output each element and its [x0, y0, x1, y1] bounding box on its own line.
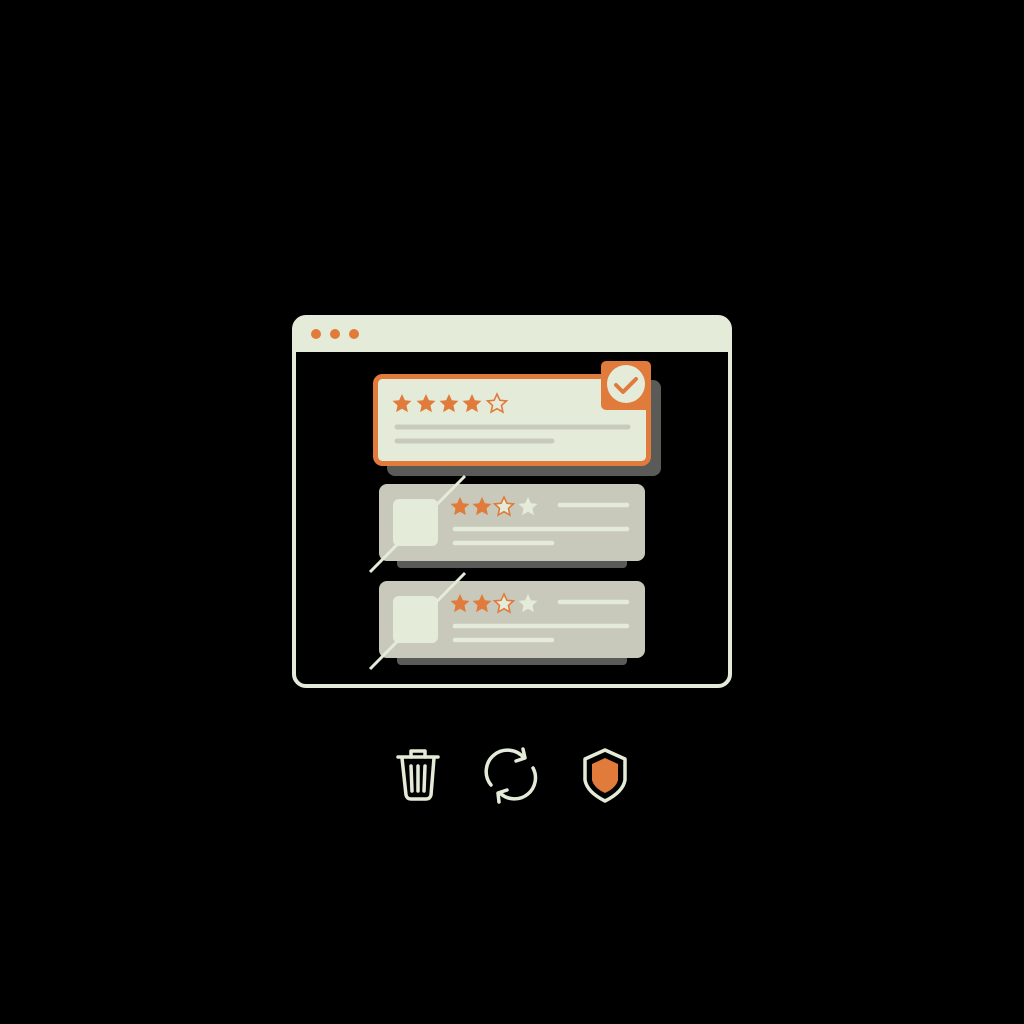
browser window: [294, 317, 730, 686]
badge: check: [601, 361, 651, 410]
card: review 3: [370, 573, 645, 669]
icon: refresh: [486, 749, 535, 802]
card: top review highlighted: [376, 361, 661, 476]
icon: shield: [585, 750, 625, 801]
icon: trash: [398, 751, 438, 799]
window dots: [311, 329, 359, 339]
card: review 2: [370, 476, 645, 572]
